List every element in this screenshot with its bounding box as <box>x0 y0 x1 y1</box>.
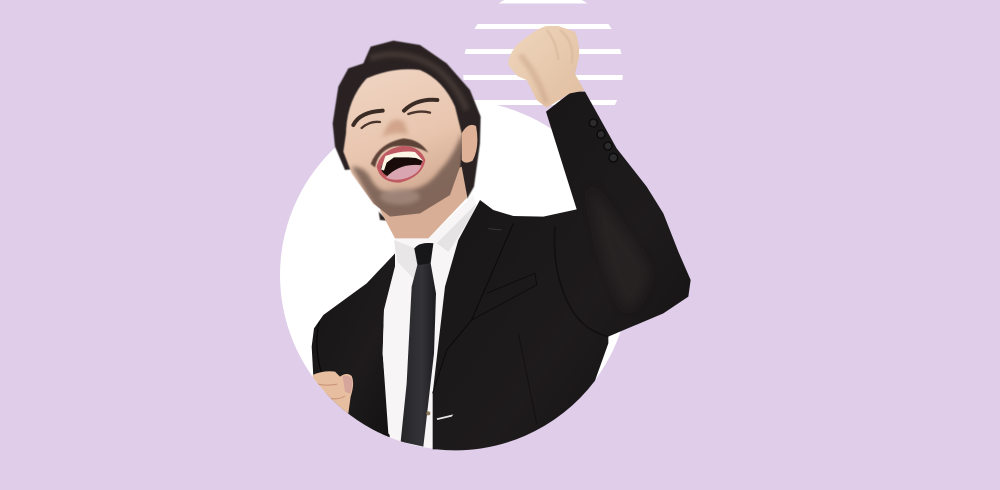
man <box>312 26 691 450</box>
pocket square pin <box>437 414 453 420</box>
left suit shoulder <box>312 252 397 440</box>
eyebrows <box>353 100 437 125</box>
illustration: celebrating man on lilac background <box>280 0 691 450</box>
neck <box>380 167 467 238</box>
ear <box>462 125 477 163</box>
sleeve buttons <box>589 119 618 162</box>
hair <box>333 41 481 221</box>
hair highlight <box>370 54 467 110</box>
raised fist <box>508 26 584 108</box>
suit body and raised sleeve <box>433 92 691 450</box>
lapel and pocket details <box>433 223 608 423</box>
sleeve sheen <box>590 187 647 310</box>
necktie <box>401 243 436 447</box>
mouth <box>377 146 425 183</box>
jacket button <box>426 411 430 415</box>
decorative striped circle <box>460 0 630 105</box>
moustache <box>371 138 428 167</box>
face <box>343 69 462 217</box>
eyes <box>362 112 430 128</box>
white circle backdrop <box>280 100 630 450</box>
nose shadow <box>382 120 408 137</box>
left fist <box>313 371 353 413</box>
shirt <box>383 195 477 450</box>
beard <box>350 134 462 216</box>
